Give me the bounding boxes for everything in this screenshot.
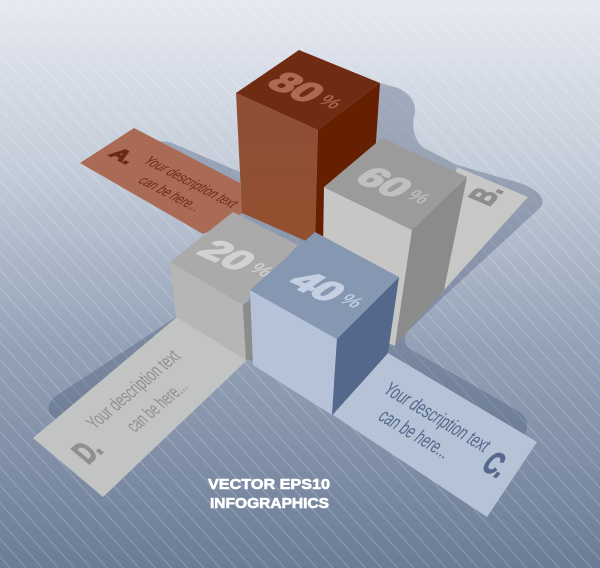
title: VECTOR EPS10 (208, 477, 330, 493)
60% label: % (401, 187, 436, 207)
panel B (430, 167, 528, 300)
60% label (346, 161, 443, 213)
panel C description line 1: Your description text (379, 378, 495, 456)
bar: 40% (250, 232, 399, 415)
bar: 60% (322, 138, 467, 346)
panel D description line 2: can be here... (122, 377, 192, 436)
panel D description line 1: Your description text (82, 346, 186, 433)
panel C description line 2: can be here... (374, 405, 456, 463)
80% label: % (313, 92, 348, 112)
panel D letter: D. (64, 431, 110, 470)
40% label: % (334, 291, 369, 311)
panel B letter: B. (462, 179, 512, 210)
title: INFOGRAPHICS (210, 496, 329, 512)
40% label: 40 (279, 265, 355, 308)
panel A letter: A. (104, 145, 142, 167)
80% label: 80 (258, 66, 334, 109)
bar: 80% (236, 50, 380, 245)
panel C letter: C. (475, 445, 518, 484)
panel C (333, 353, 537, 517)
60% label: 60 (346, 161, 422, 204)
40% label (279, 265, 376, 317)
panel A description line 1: Your description text (139, 154, 244, 210)
20% label: 20 (189, 234, 265, 277)
panel A (80, 128, 244, 234)
drop shadows (48, 83, 542, 435)
20% label: % (244, 260, 279, 280)
panel A description line 2: can be here... (134, 174, 207, 214)
panel D (33, 317, 247, 497)
title (208, 477, 330, 512)
20% label (189, 234, 286, 286)
80% label (258, 66, 355, 118)
bar: 20% (170, 212, 298, 360)
